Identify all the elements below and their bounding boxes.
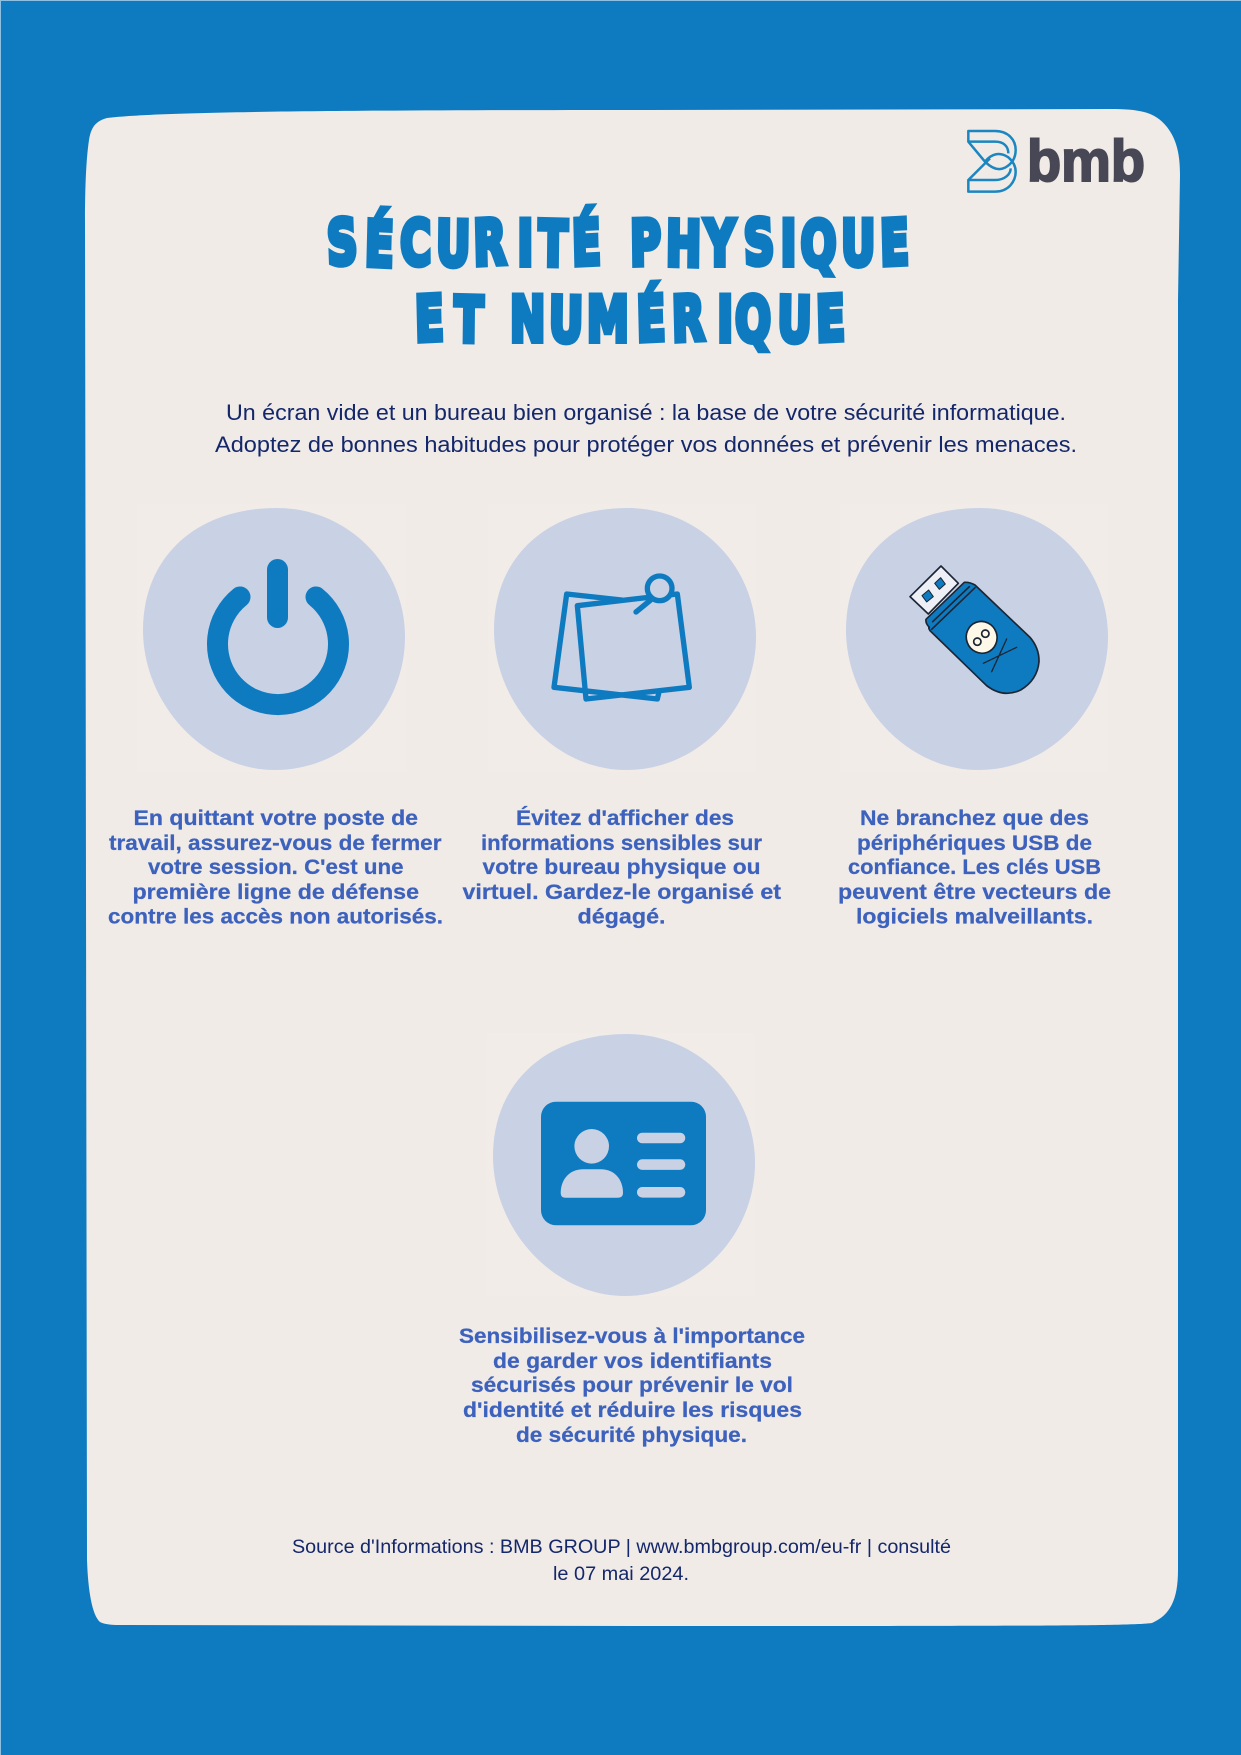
icon: power button [218, 570, 338, 705]
text: credentials: de garder vos identifiants [493, 1349, 772, 1373]
icon: ID card [541, 1102, 706, 1225]
text: close session: première ligne de défense [132, 880, 419, 904]
panel: main cream card [85, 109, 1180, 1626]
source text [292, 1537, 951, 1585]
text: close session: En quittant votre poste de [134, 806, 418, 830]
source text: le 07 mai 2024. [553, 1564, 689, 1585]
text: trusted USB: peuvent être vecteurs de [838, 880, 1111, 904]
text: trusted USB: logiciels malveillants. [856, 904, 1093, 928]
text: trusted USB: confiance. Les clés USB [848, 855, 1101, 879]
panel: tidy desk [462, 504, 781, 928]
logo: bmb [968, 129, 1145, 194]
text: trusted USB [838, 806, 1111, 928]
icon: sticky notes with pin [554, 576, 689, 699]
icon backdrop: blob [487, 1033, 755, 1296]
intro text: Un écran vide et un bureau bien organisé : la base de votre sécurité informatique. [226, 400, 1066, 425]
icon backdrop: blob [137, 504, 406, 772]
text: tidy desk: votre bureau physique ou [482, 855, 760, 879]
text: tidy desk: informations sensibles sur [481, 831, 763, 855]
panel: trusted USB [838, 504, 1111, 928]
intro text [215, 400, 1077, 457]
text: close session [108, 806, 443, 928]
icon: bmb logo mark [968, 131, 1016, 192]
text: credentials: de sécurité physique. [516, 1423, 747, 1447]
text: tidy desk: dégagé. [578, 904, 666, 928]
panel: credentials [459, 1033, 805, 1447]
intro text: Adoptez de bonnes habitudes pour protéger vos données et prévenir les menaces. [215, 432, 1077, 457]
text: trusted USB: périphériques USB de [857, 831, 1092, 855]
text: credentials: Sensibilisez-vous à l'importance [459, 1324, 805, 1348]
title: ET NUMÉRIQUE [414, 281, 846, 357]
icon backdrop: blob [488, 504, 756, 772]
icon backdrop: blob [840, 504, 1108, 772]
icon: USB key with skull [910, 566, 1039, 693]
title [326, 205, 910, 357]
text: credentials [459, 1324, 805, 1447]
text: tidy desk: virtuel. Gardez-le organisé et [462, 880, 781, 904]
text: tidy desk [462, 805, 781, 928]
panel: close session [108, 504, 443, 928]
logo wordmark: bmb [1027, 129, 1145, 194]
text: credentials: sécurisés pour prévenir le vol [471, 1373, 793, 1397]
title: SÉCURITÉ PHYSIQUE [326, 205, 910, 282]
text: close session: votre session. C'est une [148, 855, 404, 879]
source text: Source d'Informations : BMB GROUP | www.bmbgroup.com/eu-fr | consulté [292, 1537, 951, 1558]
text: tidy desk: Évitez d'afficher des [516, 805, 734, 830]
text: close session: travail, assurez-vous de fermer [109, 831, 442, 855]
text: trusted USB: Ne branchez que des [860, 806, 1089, 830]
text: close session: contre les accès non autorisés. [108, 904, 443, 928]
text: credentials: d'identité et réduire les risques [463, 1398, 802, 1422]
